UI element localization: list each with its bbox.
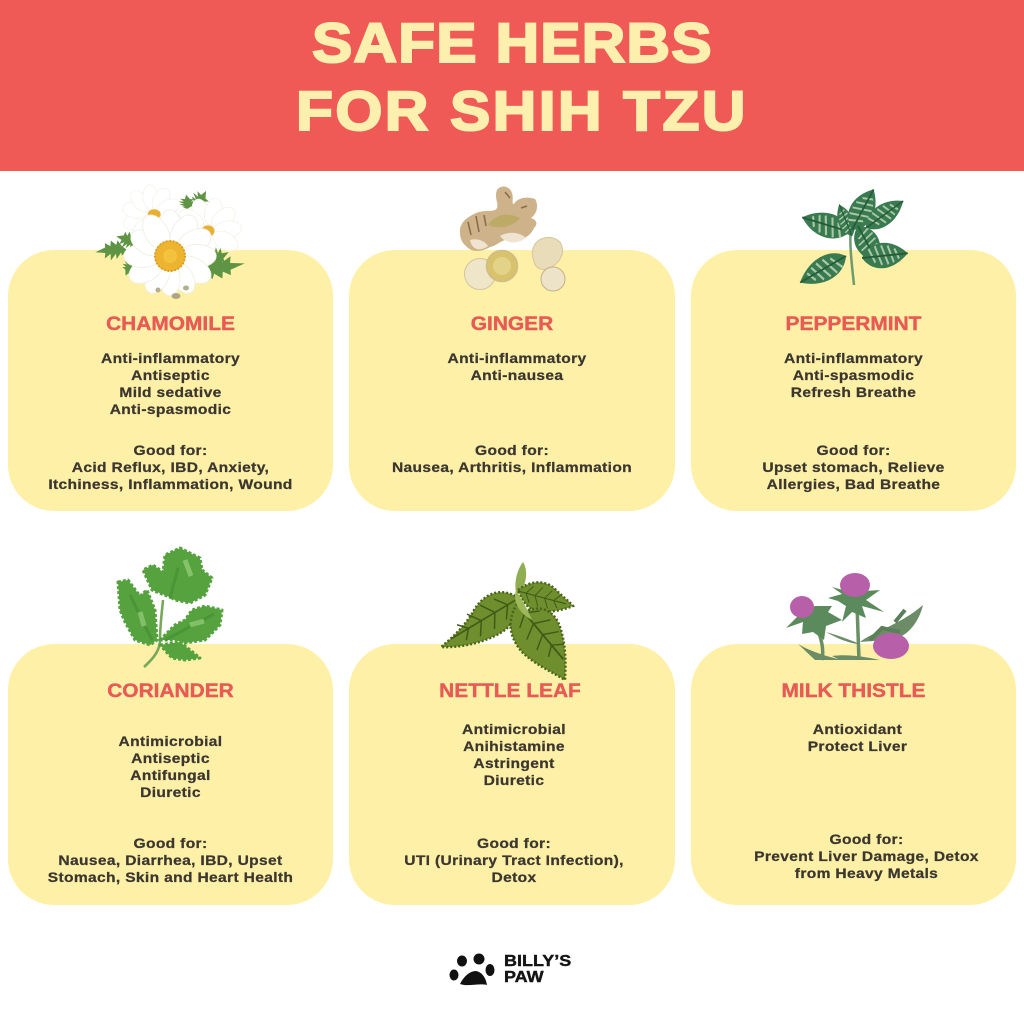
good for: coriander: Stomach, Skin and Heart Health <box>48 869 293 885</box>
panel: nettle leaf <box>349 644 675 905</box>
good for: chamomile: Good for: <box>134 442 207 458</box>
title line 1: SAFE HERBS <box>312 11 713 74</box>
properties: chamomile: Anti-inflammatory <box>101 350 240 366</box>
properties: nettle leaf <box>462 721 566 788</box>
good for: ginger <box>392 442 632 475</box>
brand name <box>504 953 571 986</box>
brand name: BILLY’S <box>504 953 571 970</box>
properties: chamomile: Antiseptic <box>131 367 210 383</box>
icon: nettle leaves <box>440 562 575 680</box>
properties: peppermint: Anti-inflammatory <box>784 350 923 366</box>
heading: peppermint: PEPPERMINT <box>786 314 921 335</box>
properties: chamomile <box>101 350 240 418</box>
good for: milk thistle: Prevent Liver Damage, Detox <box>754 848 979 864</box>
good for: chamomile: Itchiness, Inflammation, Wound <box>48 476 293 492</box>
good for: nettle leaf <box>404 835 624 885</box>
properties: milk thistle <box>808 721 907 754</box>
panel: milk thistle <box>691 644 1016 905</box>
heading: chamomile: CHAMOMILE <box>106 314 235 335</box>
good for: peppermint: Good for: <box>817 442 890 458</box>
properties: nettle leaf: Astringent <box>473 755 555 771</box>
panel: chamomile <box>8 250 333 511</box>
properties: nettle leaf: Antimicrobial <box>462 721 566 737</box>
properties: chamomile: Anti-spasmodic <box>110 401 231 417</box>
good for: ginger: Good for: <box>475 442 549 458</box>
good for: chamomile <box>48 442 293 492</box>
good for: milk thistle: from Heavy Metals <box>795 865 938 881</box>
properties: peppermint <box>784 350 923 400</box>
good for: nettle leaf: UTI (Urinary Tract Infection), <box>404 852 624 868</box>
properties: peppermint: Refresh Breathe <box>791 384 916 400</box>
properties: ginger: Anti-nausea <box>470 367 563 383</box>
properties: chamomile: Mild sedative <box>119 384 222 400</box>
good for: milk thistle: Good for: <box>830 831 903 847</box>
heading: coriander: CORIANDER <box>107 681 234 702</box>
good for: milk thistle <box>754 831 979 882</box>
icon: milk thistle <box>786 573 923 660</box>
properties: ginger <box>447 350 586 383</box>
properties: coriander: Antifungal <box>130 767 211 783</box>
properties: nettle leaf: Anihistamine <box>463 738 565 754</box>
good for: nettle leaf: Detox <box>492 869 536 885</box>
icon: coriander leaf <box>116 546 224 668</box>
icon: chamomile flowers <box>96 184 245 299</box>
properties: coriander: Antiseptic <box>131 750 210 766</box>
properties: coriander <box>118 733 222 800</box>
logo: Billy's Paw <box>450 953 571 986</box>
title line 2: FOR SHIH TZU <box>296 79 748 142</box>
panel: ginger <box>349 250 675 511</box>
icon: ginger root and slices <box>460 186 566 292</box>
good for: peppermint: Allergies, Bad Breathe <box>767 476 940 492</box>
panel: peppermint <box>691 250 1016 511</box>
good for: coriander: Good for: <box>134 835 207 851</box>
icon: peppermint sprig <box>800 189 908 286</box>
properties: milk thistle: Antioxidant <box>813 721 902 737</box>
properties: ginger: Anti-inflammatory <box>447 350 586 366</box>
good for: ginger: Nausea, Arthritis, Inflammation <box>392 459 632 475</box>
good for: peppermint <box>762 442 945 492</box>
brand name: PAW <box>504 969 544 986</box>
properties: coriander: Antimicrobial <box>119 733 222 749</box>
good for: peppermint: Upset stomach, Relieve <box>762 459 945 475</box>
properties: peppermint: Anti-spasmodic <box>793 367 914 383</box>
good for: nettle leaf: Good for: <box>477 835 551 851</box>
heading: ginger: GINGER <box>471 314 553 335</box>
heading: milk thistle: MILK THISTLE <box>782 681 925 702</box>
panel: coriander <box>8 644 333 905</box>
title banner <box>0 0 1024 171</box>
properties: milk thistle: Protect Liver <box>808 738 907 754</box>
good for: coriander: Nausea, Diarrhea, IBD, Upset <box>58 852 283 868</box>
icon: black paw <box>450 954 494 986</box>
properties: nettle leaf: Diuretic <box>484 772 544 788</box>
heading: nettle leaf: NETTLE LEAF <box>439 681 580 702</box>
properties: coriander: Diuretic <box>140 784 201 800</box>
good for: chamomile: Acid Reflux, IBD, Anxiety, <box>72 459 269 475</box>
good for: coriander <box>48 835 293 885</box>
